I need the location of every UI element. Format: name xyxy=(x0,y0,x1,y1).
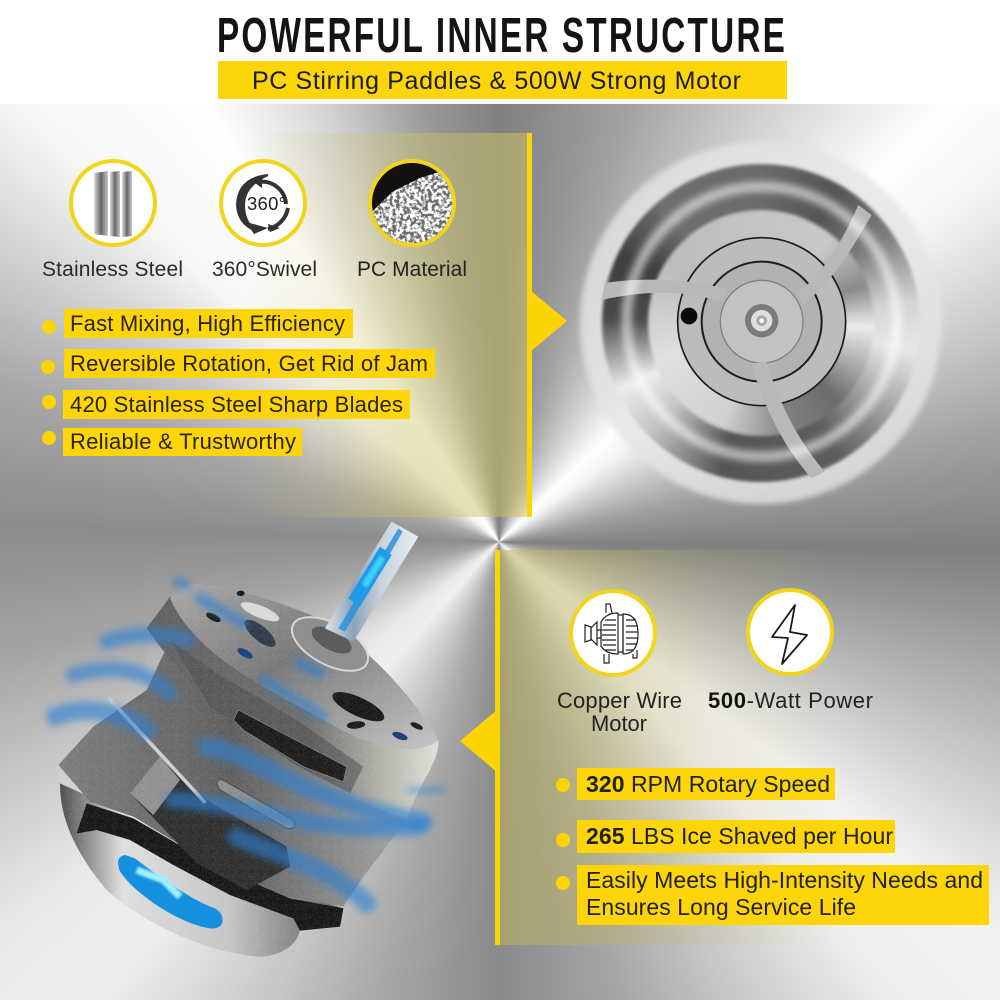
disc outer ring xyxy=(602,164,920,482)
header: white title band xyxy=(0,0,1000,104)
disc halo xyxy=(580,142,942,504)
panel: upper-left yellow tinted area xyxy=(240,133,530,517)
panel divider: upper yellow line xyxy=(527,133,532,517)
feature: fast mixing: Fast Mixing, High Efficiency xyxy=(70,311,345,336)
motor shaft xyxy=(325,522,418,642)
feature: service life xyxy=(556,865,989,925)
title: POWERFUL INNER STRUCTURE xyxy=(217,8,785,63)
panel divider: lower yellow line xyxy=(495,550,500,945)
feature: rotary speed: 320 RPM Rotary Speed xyxy=(586,771,830,797)
spokes and concentric rings xyxy=(602,177,902,478)
motor glowing slot xyxy=(118,855,223,928)
arrow: pointing to motor xyxy=(460,710,497,772)
icon: 360 swivel xyxy=(221,161,305,245)
subtitle bar: PC Stirring Paddles & 500W Strong Motor xyxy=(252,67,741,95)
subtitle bar xyxy=(218,61,787,99)
motor surface texture xyxy=(58,583,440,957)
motor grille slot xyxy=(217,779,295,829)
feature: service life: Ensures Long Service Life xyxy=(586,894,856,920)
blue motion streaks xyxy=(55,582,443,903)
motor stator dark section xyxy=(130,758,290,890)
motor honeycomb slot xyxy=(233,710,347,782)
icon: lightning bolt xyxy=(748,590,832,674)
label: copper wire motor: Copper Wire xyxy=(557,688,682,713)
motor lower housing xyxy=(60,783,343,957)
feature list: upper panel xyxy=(41,309,435,456)
feature: sharp blades: 420 Stainless Steel Sharp Blades xyxy=(70,392,403,417)
arrow: pointing to disc xyxy=(530,290,567,352)
label: PC material: PC Material xyxy=(357,258,467,281)
icon: stainless steel xyxy=(71,161,155,245)
motor dark band xyxy=(77,803,343,931)
icon: PC material xyxy=(370,161,454,250)
feature: ice shaved: 265 LBS Ice Shaved per Hour xyxy=(586,823,893,849)
photo: electric motor with blue motion streaks xyxy=(55,522,443,957)
label: 500-watt power: 500-Watt Power xyxy=(708,688,873,713)
feature: reversible rotation: Reversible Rotation, Get Rid of Jam xyxy=(70,351,428,376)
feature list: lower panel xyxy=(556,768,989,925)
icon: copper wire motor xyxy=(571,591,655,675)
label: 360 swivel: 360°Swivel xyxy=(212,258,317,281)
motor bearing xyxy=(284,606,376,682)
icon: 360 swivel: 360° xyxy=(247,193,286,214)
feature: service life: Easily Meets High-Intensity Needs and xyxy=(586,867,983,893)
label: motor: Motor xyxy=(591,711,647,736)
disc inner plate xyxy=(648,210,874,436)
panel: lower-right yellow tinted area xyxy=(497,550,837,945)
motor upper body xyxy=(147,597,438,820)
label: stainless steel: Stainless Steel xyxy=(42,258,183,281)
motor top plate holes xyxy=(205,591,424,742)
motor stator body xyxy=(58,640,407,907)
feature: reliable: Reliable & Trustworthy xyxy=(70,429,296,454)
photo: stirring paddle disc xyxy=(578,143,942,507)
motor top plate xyxy=(170,583,438,749)
